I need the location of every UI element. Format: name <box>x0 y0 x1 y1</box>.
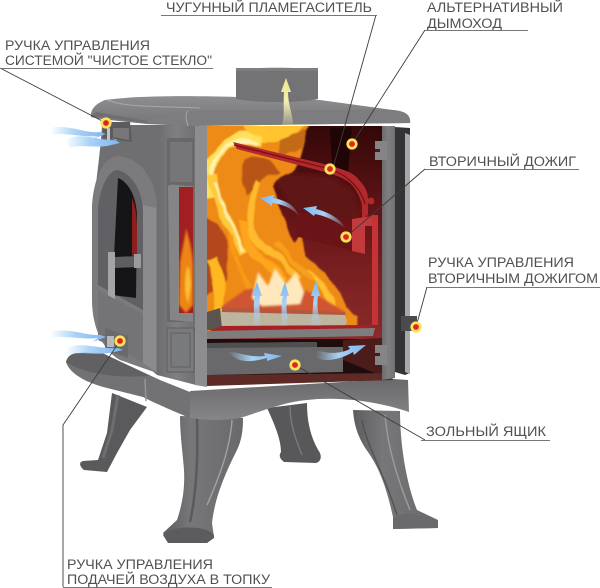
air arrows: secondary burn <box>260 195 345 228</box>
label: secondary burn: ВТОРИЧНЫЙ ДОЖИГ <box>429 154 577 169</box>
secondary burn plate <box>295 212 378 325</box>
side door arch <box>92 156 157 373</box>
side panel between face and firebox <box>157 125 196 385</box>
firebox interior back wall <box>207 126 383 346</box>
stove left face <box>92 122 157 375</box>
firebox front post <box>195 126 207 387</box>
label: alternative flue: ДЫМОХОД <box>427 16 502 31</box>
label: primary air handle <box>63 557 272 588</box>
label: alternative flue: АЛЬТЕРНАТИВНЫЙ <box>427 0 563 15</box>
upper side plate with handle <box>103 122 132 142</box>
glowing embers <box>222 268 345 318</box>
callout dots <box>100 117 422 371</box>
ash drawer <box>207 342 343 375</box>
lower side plate with handle <box>105 328 128 358</box>
lower ash compartment <box>207 338 393 386</box>
open door <box>395 127 417 375</box>
label: clean glass handle <box>0 38 213 69</box>
flames <box>207 126 358 331</box>
leg: front right <box>353 410 438 529</box>
air arrows: ash chamber <box>228 345 366 361</box>
label: clean glass handle: СИСТЕМОЙ "ЧИСТОЕ СТЕКЛО" <box>5 53 212 68</box>
label: alternative flue <box>425 0 563 31</box>
label: secondary burn handle <box>426 255 600 288</box>
label: primary air handle: РУЧКА УПРАВЛЕНИЯ <box>67 557 213 572</box>
stove top plate <box>91 96 410 126</box>
air arrows: clean glass intake <box>50 127 120 148</box>
firebox right post and hinges <box>375 126 395 380</box>
leg: back left <box>80 393 147 472</box>
label: ash drawer: ЗОЛЬНЫЙ ЯЩИК <box>426 424 546 439</box>
base plate <box>66 352 409 420</box>
ash shelf grate <box>207 328 375 339</box>
label: flame arrester: ЧУГУННЫЙ ПЛАМЕГАСИТЕЛЬ <box>166 0 372 15</box>
leg: back right <box>267 403 321 463</box>
flue collar <box>236 68 318 102</box>
leg: front centre <box>163 416 243 543</box>
firewood log <box>207 307 372 332</box>
label: secondary burn handle: ВТОРИЧНЫМ ДОЖИГОМ <box>428 271 598 286</box>
air arrows: primary intake <box>50 330 123 355</box>
air arrows: upward through log <box>252 280 321 326</box>
label: primary air handle: ПОДАЧЕЙ ВОЗДУХА В ТОПКУ <box>67 572 270 587</box>
baffle: cast-iron flame arrester <box>233 142 374 219</box>
arrow: flue gas <box>281 78 293 125</box>
label: secondary burn handle: РУЧКА УПРАВЛЕНИЯ <box>428 255 574 270</box>
label: clean glass handle: РУЧКА УПРАВЛЕНИЯ <box>5 38 150 53</box>
callout leaders <box>0 15 427 587</box>
